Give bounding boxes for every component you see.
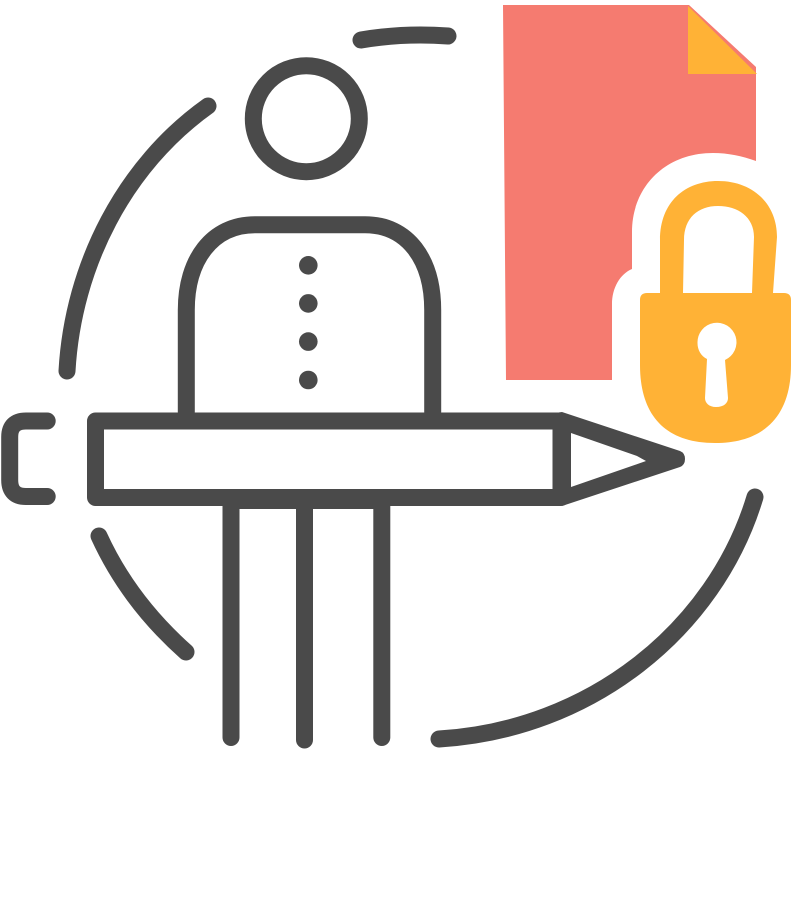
icon: padlock <box>640 181 791 443</box>
icon: dashed circle <box>67 35 755 739</box>
icon: pencil <box>10 412 685 506</box>
icon: red document <box>503 5 757 380</box>
icon: person <box>186 66 433 740</box>
